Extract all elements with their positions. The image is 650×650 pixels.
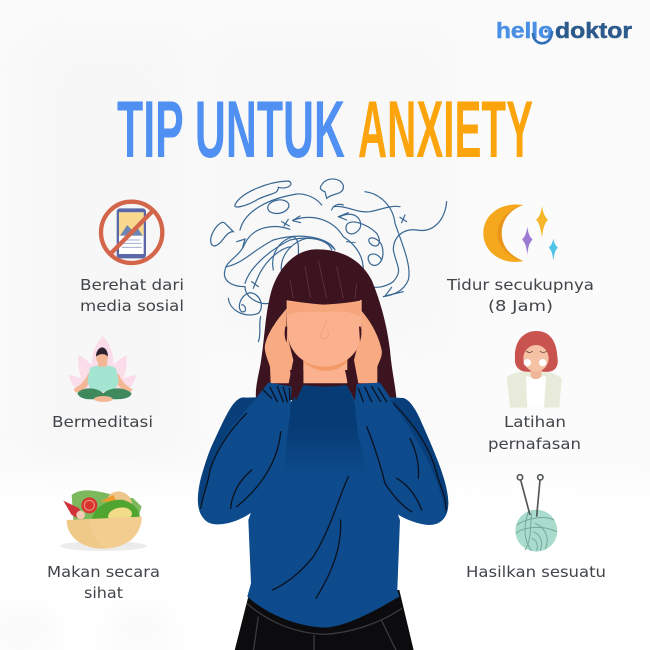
icon: no social media bbox=[101, 202, 162, 263]
label: Tidur secukupnya (8 Jam): (8 Jam) bbox=[488, 297, 553, 315]
icon: meditation bbox=[68, 336, 137, 402]
face bbox=[287, 300, 362, 367]
thought scribbles bbox=[211, 179, 447, 342]
woman illustration bbox=[198, 179, 448, 650]
label: Tidur secukupnya (8 Jam): Tidur secukupnya bbox=[446, 276, 594, 294]
logo: hellodoktor: doktor bbox=[555, 18, 632, 43]
hands bbox=[265, 308, 293, 383]
icon: yarn and needles bbox=[515, 475, 557, 552]
icon: moon and stars bbox=[483, 204, 558, 262]
sweater bbox=[198, 370, 448, 628]
label: Latihan pernafasan: Latihan bbox=[504, 413, 566, 431]
label: Latihan pernafasan: pernafasan bbox=[488, 435, 581, 453]
icon: breathing woman bbox=[507, 331, 562, 408]
label: Berehat dari media sosial: Berehat dari bbox=[80, 276, 184, 294]
label: Berehat dari media sosial bbox=[80, 276, 184, 315]
logo: hellodoktor: hello bbox=[496, 18, 553, 43]
label: Makan secara sihat bbox=[47, 563, 160, 602]
logo: hellodoktor bbox=[496, 18, 632, 43]
label: Tidur secukupnya (8 Jam) bbox=[446, 276, 594, 315]
label: Hasilkan sesuatu: Hasilkan sesuatu bbox=[466, 563, 606, 581]
label: Latihan pernafasan bbox=[488, 413, 581, 453]
icon: salad bowl bbox=[60, 490, 147, 551]
label: Bermeditasi: Bermeditasi bbox=[52, 413, 153, 431]
label: Berehat dari media sosial: media sosial bbox=[80, 297, 184, 315]
label: Makan secara sihat: Makan secara bbox=[47, 563, 160, 581]
hair, face and hands bbox=[256, 249, 397, 400]
neck bbox=[303, 353, 347, 383]
bangs bbox=[277, 249, 368, 305]
label: Makan secara sihat: sihat bbox=[84, 584, 123, 602]
pants bbox=[234, 590, 414, 650]
title: TIP UNTUK bbox=[117, 85, 345, 175]
